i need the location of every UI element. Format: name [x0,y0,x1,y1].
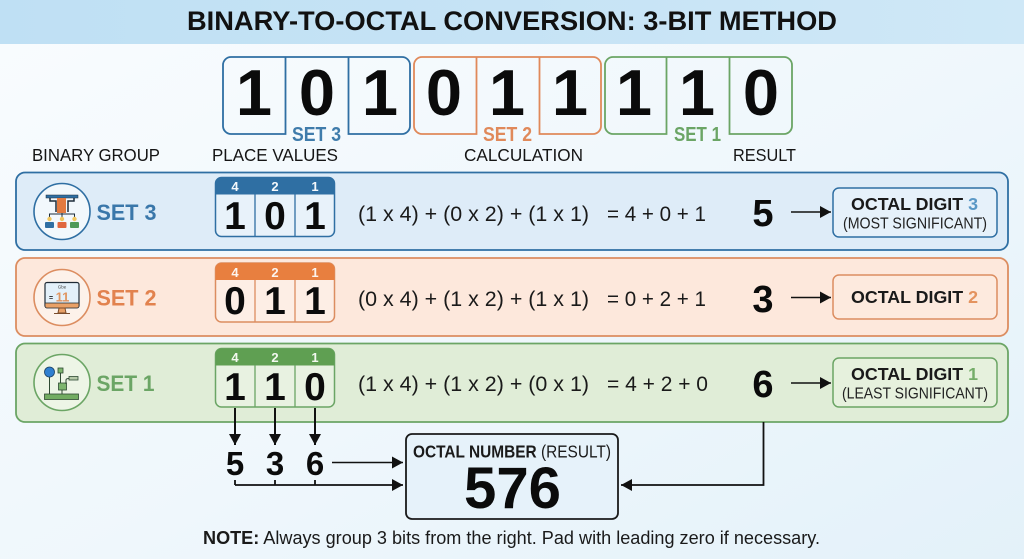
callout: octal digit 3: OCTAL DIGIT 3 [851,194,978,214]
octal digits row: 6 [306,445,324,482]
note: NOTE: Always group 3 bits from the right. Pad with leading zero if necessary. [203,528,820,548]
arrow: result column to octal number [621,422,764,485]
calculation: (1 x 4) + (1 x 2) + (0 x 1) [358,373,589,396]
group: set 1 bits: SET 1 [674,124,721,146]
result digit: 3 [752,279,774,321]
place value table: 0 [264,195,286,238]
panel: set 3 row [16,172,1008,250]
group: set 3 bits: 1 [236,56,272,129]
place value table: 0 [224,280,246,323]
group: set 3 bits: 1 [362,56,398,129]
callout: octal digit 1: (LEAST SIGNIFICANT) [842,386,988,402]
octal digits row: 3 [266,445,284,482]
place value table: 1 [311,265,319,280]
calculation: = 4 + 2 + 0 [607,373,708,396]
place value table [216,348,334,409]
callout: octal digit 2 [833,275,997,319]
icon: monitor: 11 [56,290,69,304]
column headers: BINARY GROUP [32,145,160,165]
group: set 1 bits: 0 [743,56,779,129]
icon: monitor [34,270,90,326]
icon: hierarchy [34,184,90,240]
arrow [791,296,831,298]
place value table: 1 [304,195,326,238]
calculation [358,373,708,396]
result digit: 6 [752,364,774,406]
arrow: digits to result [332,462,403,464]
group: set 2 bits: SET 2 [483,124,532,146]
title: BINARY-TO-OCTAL CONVERSION: 3-BIT METHOD [187,6,837,36]
callout: octal digit 1 [833,358,997,407]
calculation: (1 x 4) + (0 x 2) + (1 x 1) [358,203,589,226]
group: set 3 bits: SET 3 [292,124,341,146]
place value table: 4 [231,350,239,365]
calculation: = 0 + 2 + 1 [607,288,706,311]
result box: octal number: OCTAL NUMBER (RESULT) [413,442,611,462]
panel: set 2 row [16,258,1008,336]
calculation: (0 x 4) + (1 x 2) + (1 x 1) [358,288,589,311]
place value table: 1 [311,179,319,194]
place value table: 0 [304,366,326,409]
icon: monitor: Gbe [58,284,67,290]
arrow: bracket to result [235,480,403,485]
callout: octal digit 2: OCTAL DIGIT 2 [851,287,978,307]
group: set 2 bits: 0 [426,56,462,129]
place value table: 2 [271,179,279,194]
group: set 2 bits: 1 [489,56,525,129]
place value table: 1 [264,280,286,323]
icon: monitor: = [49,295,53,302]
octal digits row: 5 [226,445,244,482]
panel: set 1 row: SET 1 [96,371,154,396]
column headers: RESULT [733,145,796,165]
calculation [358,288,706,311]
place value table: 4 [231,179,239,194]
callout: octal digit 3: (MOST SIGNIFICANT) [843,216,987,232]
arrows: bits down to digits [235,408,315,445]
panel: set 1 row [16,344,1008,422]
arrow [791,382,831,384]
column headers [32,145,796,165]
panel: set 2 row: SET 2 [96,286,156,310]
result box: octal number: 576 [464,456,561,521]
callout: octal digit 3 [833,188,997,237]
place value table: 1 [311,350,319,365]
place value table [216,263,334,323]
place value table: 1 [224,195,246,238]
result digit: 5 [752,193,774,235]
column headers: PLACE VALUES [212,145,338,165]
icon: device [34,354,90,410]
place value table: 4 [231,265,239,280]
calculation: = 4 + 0 + 1 [607,203,706,226]
calculation [358,203,706,226]
octal digits row [226,445,324,482]
group: set 3 bits [223,56,410,146]
group: set 1 bits [605,56,792,146]
group: set 1 bits: 1 [679,56,715,129]
place value table: 2 [271,265,279,280]
place value table: 2 [271,350,279,365]
place value table: 1 [224,366,246,409]
group: set 2 bits [414,56,601,146]
place value table: 1 [264,366,286,409]
place value table: 1 [304,280,326,323]
column headers: CALCULATION [464,145,583,165]
group: set 1 bits: 1 [616,56,652,129]
group: set 2 bits: 1 [552,56,588,129]
group: set 3 bits: 0 [299,56,335,129]
binary number strip [223,56,792,146]
place value table [216,178,334,238]
title [0,0,1024,44]
result box: octal number [406,434,618,521]
panel: set 3 row: SET 3 [96,200,156,225]
callout: octal digit 1: OCTAL DIGIT 1 [851,364,978,384]
arrow [791,211,831,213]
